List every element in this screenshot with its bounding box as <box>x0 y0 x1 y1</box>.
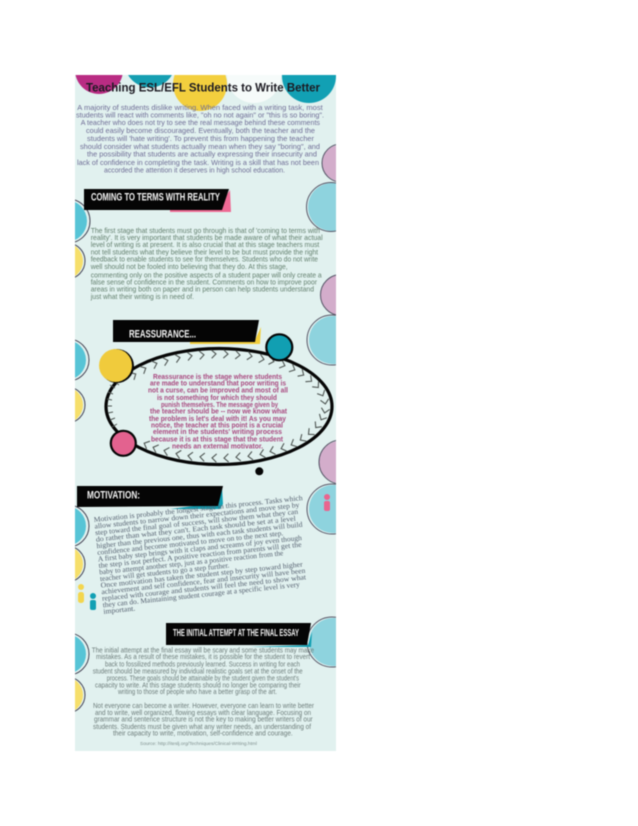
banner: motivation <box>77 486 223 509</box>
infographic <box>74 74 337 752</box>
diagram: reassurance ellipse <box>99 334 332 475</box>
text: conclusion <box>93 701 314 738</box>
text: coming to terms: feedback to enable students to see for themselves. Students who do not write <box>91 255 318 264</box>
reassurance text: because it is at this stage that the student <box>151 434 284 444</box>
banner: motivation: MOTIVATION: <box>87 490 140 502</box>
decorative circles <box>74 74 337 712</box>
text: coming to terms: false sense of confidence in the student. Comments on how to improve poor <box>91 277 318 286</box>
text: coming to terms: level of writing is at present. It is also crucial that at this stage teachers must <box>91 240 319 249</box>
text: initial attempt: writing to those of people who have a better grasp of the art. <box>117 687 277 696</box>
top circles <box>75 74 337 112</box>
chevrons <box>134 354 325 458</box>
ellipse ring <box>106 348 332 464</box>
banner: coming to terms with reality <box>84 189 231 212</box>
text: motivation: higher than the previous one, thus with each task students will build <box>96 520 303 550</box>
reassurance text: notice, the teacher at this point is a crucial <box>151 420 283 430</box>
text: initial attempt: process. These goals should be attainable by the student given the student's <box>107 674 299 683</box>
reassurance text: are made to understand that poor writing is <box>150 378 286 387</box>
reassurance text: Reassurance is the stage where students <box>153 372 282 381</box>
text: motivation <box>93 493 313 616</box>
source line: Source: http://iteslj.org/Techniques/Clinical-Writing.html <box>140 741 257 747</box>
reassurance text: not a curse, can be improved and most of all <box>148 386 288 394</box>
text: initial attempt <box>92 645 314 696</box>
icon: pink person <box>324 494 330 511</box>
intro text <box>76 103 324 174</box>
text: motivation: A first baby step brings with it claps and screams of joy even though <box>97 533 303 563</box>
text: coming to terms: not tell students what they believe their level to be but must provide the right <box>91 247 318 256</box>
text: initial attempt: mistakes. As a result of these mistakes, it is possible for the student to revert <box>96 652 310 661</box>
text: motivation: allow students to narrow down their expectations and move step by <box>94 500 300 531</box>
banner: coming to terms with reality: COMING TO TERMS WITH REALITY <box>91 192 220 204</box>
intro text: could easily become discouraged. Eventually, both the teacher and the <box>86 126 315 135</box>
reassurance text: the problem is let's deal with it! As you may <box>149 414 286 423</box>
intro text: A teacher who does not try to see the real message behind these comments <box>81 118 320 127</box>
intro text: accorded the attention it deserves in high school education. <box>104 166 285 174</box>
text: motivation: confidence and become motivated to move on to the next step. <box>97 528 284 557</box>
banner: the initial attempt: THE INITIAL ATTEMPT AT THE FINAL ESSAY <box>173 628 299 639</box>
left side circles <box>74 199 92 712</box>
node: pink <box>111 431 136 456</box>
text: motivation: the step is not perfect. A positive reaction from parents will get the <box>98 540 302 570</box>
text: motivation: Once motivation has taken the student step by step toward higher <box>100 559 304 590</box>
reassurance text <box>148 372 288 450</box>
text: coming to terms <box>90 226 323 301</box>
node: teal <box>266 334 292 360</box>
text: motivation: they can do. Maintaining student courage at a specific level is very <box>102 580 300 609</box>
reassurance text: the teacher should be -- now we know what <box>150 406 288 416</box>
panel: background <box>75 75 336 751</box>
text: motivation: teacher will get students to go a step further. <box>99 561 230 583</box>
text: motivation: step toward the final goal of success, will show them what they can <box>95 507 299 537</box>
text: coming to terms: commenting only on the positive aspects of a student paper will only create a <box>91 270 323 279</box>
node: black dot <box>255 467 263 475</box>
text: initial attempt: back to fossilized methods previously learned. Success in writing for each <box>105 659 300 668</box>
node: yellow <box>99 349 134 383</box>
text: motivation: do rather than what they can't. Each task should be set at a level <box>95 514 296 544</box>
text: initial attempt: student should be measured by individual realistic goals set at the onset of the <box>93 666 303 675</box>
text: motivation: replaced with courage and students will feel the need to show what <box>102 572 306 603</box>
text: motivation: Motivation is probably the longest stage in this process. Tasks which <box>93 493 303 524</box>
text: conclusion: grammar and sentence structure is not the key to making better writers of our <box>94 715 313 724</box>
intro text: students will 'hate writing'. To prevent this from happening the teacher <box>87 134 315 143</box>
banner: reassurance <box>113 320 261 344</box>
reassurance text: is not something for which they should <box>157 393 277 402</box>
text: coming to terms: The first stage that students must go through is that of 'coming to terms with <box>91 226 320 235</box>
text: coming to terms: just what their writing is in need of. <box>90 292 194 301</box>
text: conclusion: and to write, well organized, flowing essays with clear language. Focusing on <box>95 708 311 717</box>
title: Teaching ESL/EFL Students to Write Better <box>86 80 320 94</box>
text: coming to terms: well should not be fooled into believing that they do. At this stage, <box>90 262 288 271</box>
text: conclusion: their capacity to write, motivation, self-confidence and courage. <box>113 729 293 738</box>
text: initial attempt: capacity to write. At this stage students should no longer be comparing their <box>95 680 301 689</box>
icon: teal person <box>90 593 96 610</box>
text: coming to terms: reality'. It is very important that students be made aware of what their actual <box>91 233 323 242</box>
left ticks <box>107 381 119 427</box>
intro text: lack of confidence in completing the task. Writing is a skill that has not been <box>77 158 319 167</box>
text: coming to terms: areas in writing both on paper and in person can help students understand <box>91 285 314 294</box>
text: motivation: baby to attempt another step, just as a positive reaction from the <box>99 548 284 576</box>
text: motivation: achievement and self confidence, fear and insecurity will have been <box>101 566 306 596</box>
reassurance text: needs an external motivator. <box>172 442 263 450</box>
reassurance text: element in the students' writing process <box>153 427 282 436</box>
text: initial attempt: The initial attempt at the final essay will be scary and some students may make <box>92 645 314 654</box>
text: conclusion: Not everyone can become a writer. However, everyone can learn to write better <box>93 701 314 710</box>
text: conclusion: students. Students must be given what any writer needs, an understanding of <box>93 722 312 731</box>
text: motivation: important. <box>103 604 136 616</box>
icon: yellow person <box>78 584 84 603</box>
intro text: the possibility that students are actually expressing their insecurity and <box>87 150 317 158</box>
right side circles <box>305 144 337 668</box>
banner: reassurance: REASSURANCE... <box>129 328 196 340</box>
banner: the initial attempt <box>166 623 312 647</box>
reassurance text: punish themselves. The message given by <box>161 400 278 409</box>
intro text: students will react with comments like, "oh no not again" or "this is so boring". <box>76 110 324 120</box>
intro text: should consider what students actually mean when they say "boring", and <box>80 142 320 151</box>
intro text: A majority of students dislike writing. When faced with a writing task, most <box>77 103 323 112</box>
